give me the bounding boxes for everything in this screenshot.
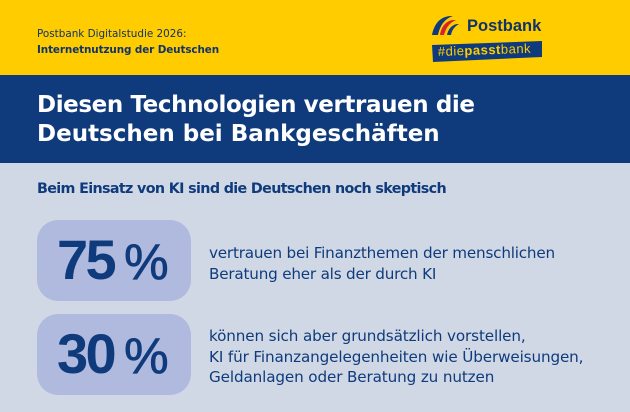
logo wordmark: Postbank [467, 17, 541, 35]
logo hashtag banner: #diepasstbank [438, 41, 531, 59]
stat value 30 percent: 30% [57, 322, 169, 385]
icon: Postbank swoosh [432, 16, 459, 35]
headline band [0, 75, 630, 163]
main headline: Deutschen bei Bankgeschäften [37, 121, 440, 147]
subheading: Beim Einsatz von KI sind die Deutschen noch skeptisch [37, 181, 446, 197]
main headline: Diesen Technologien vertrauen die [37, 92, 475, 118]
header study title: Postbank Digitalstudie 2026: [37, 28, 187, 40]
Postbank logo [432, 16, 542, 62]
stat pill: 30 percent [37, 314, 191, 395]
stat text: human advice: Beratung eher als der durch KI [209, 264, 436, 282]
stat text: openness to AI: können sich aber grundsätzlich vorstellen, [209, 327, 526, 345]
header study title [37, 28, 219, 56]
stat text: openness to AI [209, 327, 583, 386]
header study title: Internetnutzung der Deutschen [37, 44, 219, 56]
stat text: human advice [209, 244, 555, 282]
header band [0, 0, 630, 75]
main headline [37, 92, 475, 147]
stat value 75 percent: 75% [57, 228, 169, 291]
stat text: human advice: vertrauen bei Finanzthemen der menschlichen [209, 244, 555, 262]
stat text: openness to AI: KI für Finanzangelegenheiten wie Überweisungen, [209, 348, 583, 366]
stat pill: 75 percent [37, 220, 191, 301]
stat text: openness to AI: Geldanlagen oder Beratung zu nutzen [209, 368, 494, 386]
